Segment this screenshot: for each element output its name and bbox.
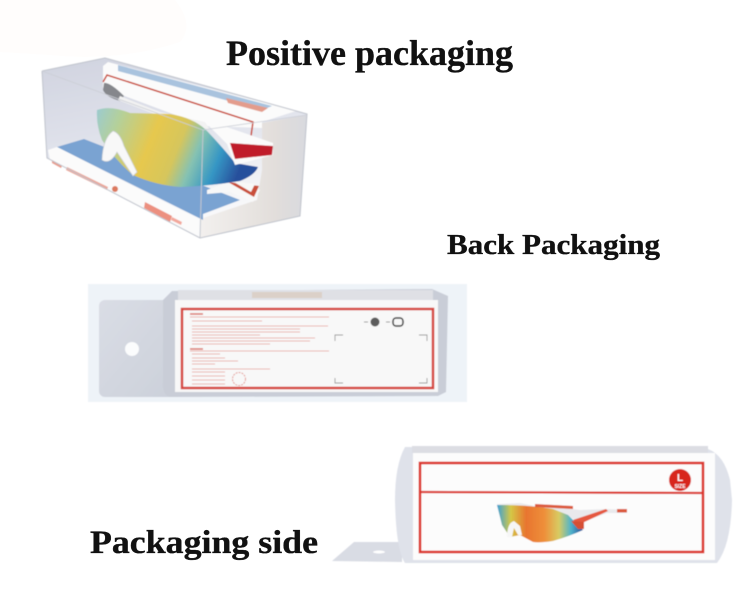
product photo: back of packaging	[88, 284, 467, 402]
red frame	[420, 463, 703, 552]
red frame	[182, 309, 433, 388]
product photo: side of packaging	[332, 446, 732, 563]
lower card tip	[207, 182, 260, 202]
barcode crop marks	[335, 335, 427, 383]
round stamp	[232, 372, 246, 386]
title: Back Packaging: Back Packaging	[447, 229, 661, 261]
box edges	[42, 58, 307, 238]
top card	[103, 62, 296, 128]
white card	[175, 300, 438, 392]
clear box	[163, 289, 448, 397]
hang tab with hole	[99, 300, 179, 397]
sunglasses in box	[97, 83, 273, 187]
clear box body	[42, 58, 307, 238]
size badge: SIZE	[674, 484, 686, 490]
hang tab	[332, 542, 402, 562]
clear box	[395, 447, 732, 563]
product photo: front view of packaging	[42, 58, 307, 238]
size badge	[669, 469, 691, 491]
faint background smudge	[0, 0, 186, 57]
white card	[413, 453, 715, 560]
title: Positive packaging: Positive packaging	[226, 33, 513, 73]
size badge: L	[677, 473, 683, 484]
title: Packaging side: Packaging side	[90, 525, 318, 561]
blue base sheet	[57, 139, 240, 220]
base card with printed text	[48, 147, 198, 236]
inner end of box	[200, 115, 307, 238]
recycling icons	[364, 318, 403, 326]
sunglasses	[497, 503, 627, 542]
fine print lines	[190, 314, 329, 384]
pale backdrop	[88, 284, 467, 402]
